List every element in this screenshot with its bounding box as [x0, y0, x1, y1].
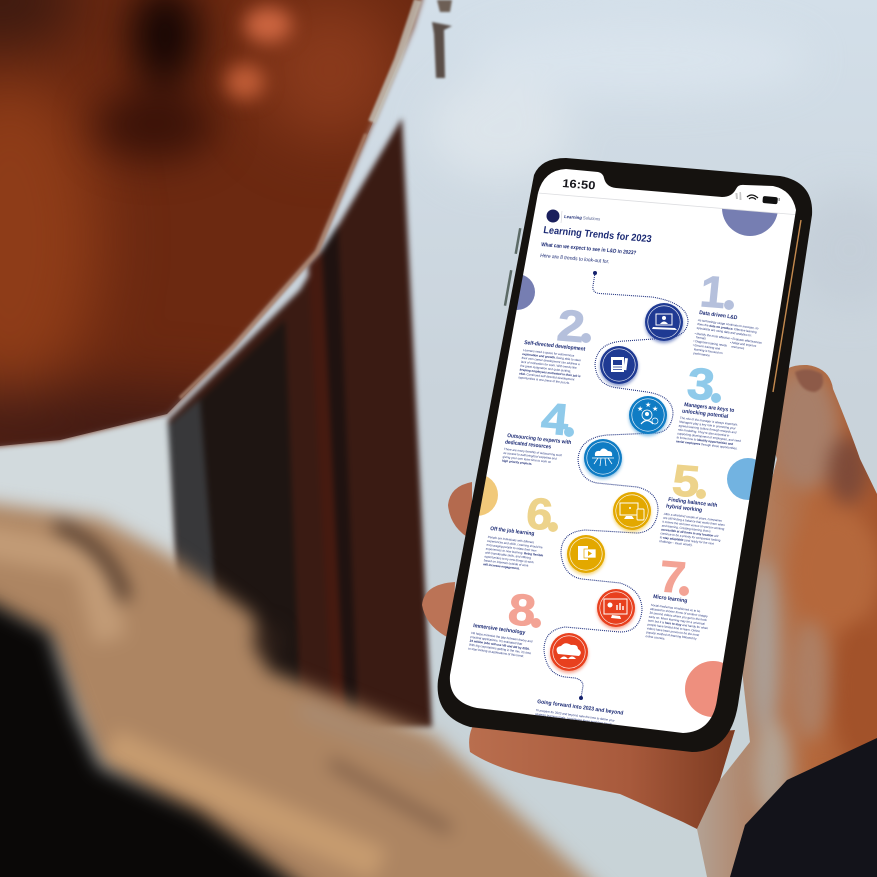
trend 5 number: 5 [670, 456, 702, 507]
trend 3 text: supporting development of employees, and need [677, 431, 742, 443]
icon: documents [600, 346, 638, 386]
trend 6 number: 6 [524, 489, 555, 540]
glasses [372, 0, 452, 122]
closing section: Going forward into 2023 and beyond [537, 699, 624, 717]
icon: monitor with charts [597, 589, 635, 629]
face [0, 0, 440, 470]
phone body [438, 158, 812, 752]
closing section [534, 699, 624, 731]
decorative circle bottom right [685, 661, 723, 717]
trend 2 number: 2 [555, 301, 587, 352]
trend 5 text: are still finding a balance that works them when [663, 516, 726, 527]
trend 5 text: and learning. Creating learning that is [661, 523, 711, 533]
trend 2 text: their own career development can address a [521, 356, 580, 366]
icon: stars and person: ★ [645, 401, 651, 409]
trend 6 text [482, 526, 547, 573]
trend 7 number: 7 [657, 552, 688, 603]
battery icon [762, 196, 780, 204]
trend 3 text: Managers are keys to [684, 402, 735, 414]
trend 4 text: as access to authoring/tool expertise and [503, 451, 557, 461]
decorative circle top right [722, 208, 778, 236]
trend 6 text: will increase engagement. [482, 562, 520, 571]
trend 5 text: hybrid working [666, 504, 703, 514]
trend 3 text: assist employees through these opportunities. [676, 439, 738, 451]
trend 7 text: attracted to shorter forms of content: snappy [650, 607, 709, 618]
status bar time: 16:50 [562, 178, 596, 192]
trend 4 number: 4 [539, 394, 571, 445]
trend 1 text: does the data we produce. Effective learning [697, 322, 757, 334]
eye socket shadow [95, 0, 215, 159]
trend 1 number [701, 276, 734, 310]
trend 3 text: Managers play a key role in promoting your [679, 420, 736, 430]
closing section: and how they support your organisation. [534, 716, 587, 727]
logo [546, 210, 601, 223]
trend 3 text: to know how to identify opportunities and [676, 435, 734, 446]
trend 7 text [645, 594, 713, 646]
logo text: Learning Solutions [564, 214, 601, 222]
closing section: strategic learning goals, considering these important trends [535, 712, 613, 726]
icon: cloud of people [550, 633, 588, 673]
trend 1 text: • Evaluate effectiveness [730, 336, 763, 345]
window frame [168, 118, 432, 730]
trend 1 text [692, 310, 762, 356]
jaw rim light [180, 134, 366, 398]
trend 8 text: Immersive technology [473, 623, 526, 636]
trend 3 number [687, 368, 721, 403]
trend 5 text: accessible at all times in any location will [661, 527, 719, 538]
trend 7 text: Micro learning [653, 594, 688, 604]
trend 3 text: unlocking potential [682, 409, 729, 420]
trend 5 text [659, 497, 729, 551]
copper edge glint [773, 220, 801, 392]
trend 2 text [518, 340, 586, 386]
trend 2 text: Learners need a space for autonomous [523, 348, 575, 358]
closing section: To prepare for 2023 and beyond, take the time to define your [535, 708, 615, 723]
trend 5 text: continue to be a priority for companies looking [660, 531, 721, 542]
left fingers [422, 482, 472, 640]
trend 7 text: early on. Micro learning may be a universal [648, 615, 705, 626]
clouds [430, 24, 877, 310]
decorative circle right blue [727, 458, 756, 500]
thumbnail [795, 369, 823, 392]
face tones [0, 0, 400, 470]
trend 1 text: Data driven L&D [699, 310, 738, 321]
icon: cloud gear [584, 439, 622, 479]
trend 1 text: • Adapt and improve [730, 340, 757, 348]
icon: video page [567, 535, 605, 575]
trend 2 text: exploration and growth. Being able to steer [522, 352, 581, 362]
trend 7 text: videos have been proven to be the most [646, 626, 700, 637]
icon: desktop and phone [613, 492, 651, 532]
dotted timeline path [544, 273, 688, 698]
trend 6 text: with transferable skills, and offering [485, 551, 532, 560]
trend 1 text: • Ensure training and [692, 343, 721, 351]
trend 1 text: formats [696, 335, 707, 341]
wifi icon [747, 195, 758, 200]
trend 1 text: learning is focused on [694, 347, 723, 355]
subtitle: What can we expect to see in L&D in 2023? [541, 242, 637, 257]
trend 1 text: resources [731, 345, 745, 350]
intro line: Here are 8 trends to look-out for. [540, 253, 610, 265]
trend 1 number: 1 [698, 267, 728, 318]
trend 4 text: Outsourcing to experts with [507, 433, 572, 446]
icon: stars and person [629, 396, 667, 436]
timeline start dot [593, 271, 597, 275]
trend 7 text: popular method of learning followed by [646, 630, 697, 641]
trend 6 text: experiences to new learning. Being flexible [485, 547, 544, 557]
trend 4 text: There are many benefits of outsourcing such [504, 447, 563, 457]
trend 7 text: online courses. [645, 634, 666, 641]
scarf [0, 500, 610, 877]
trend 7 text: 30 second videos where you get to the hook [649, 611, 708, 622]
bottom fingers [469, 716, 735, 829]
trend 8 text: VR helps minimise the gap between theory and [471, 631, 533, 644]
trend 1 text: • Identify the most effective [694, 331, 730, 340]
side buttons [504, 228, 521, 306]
decorative circle left yellow [479, 476, 498, 516]
status bar divider [538, 193, 800, 215]
trend 2 text: opportunities is one piece of the puzzle. [518, 375, 570, 385]
trend 8 text: 23 million jobs will use VR and AR by 2030. [469, 639, 530, 651]
trend 5 text: to stay adaptable (and ready for the next [659, 535, 714, 546]
trend 5 text: it comes the at-home versus on-person working [662, 520, 725, 531]
trend 2 text: lack of motivation for work. With trends like [521, 360, 577, 370]
trend 8 text [468, 623, 535, 659]
left window gap [0, 420, 185, 580]
trend 8 text: practical applications. It's estimated that [470, 635, 523, 646]
trend 5 text: challenge – touch wood!). [659, 539, 693, 547]
phone [430, 150, 820, 752]
trend 2 text: keeping employees motivated in their job is [519, 368, 581, 378]
skin tones [750, 369, 877, 820]
timeline end dot [579, 696, 583, 700]
trend 3 text: The role of the manager is always important. [680, 416, 738, 427]
status icons [735, 192, 780, 204]
trend 6 text: encouraging people to relate their own [486, 543, 537, 553]
screen background [450, 193, 796, 733]
trend 4 text: giving your own team time to work on [502, 455, 552, 464]
trend 8 text: to start looking at applications of this trend. [468, 646, 524, 658]
trend 2 text: vital. Continued self-directed development [519, 371, 575, 382]
nose highlight [225, 7, 292, 100]
trend 2 number [557, 310, 591, 343]
status bar background [722, 184, 778, 213]
sleeve [730, 738, 877, 877]
screen [450, 169, 796, 733]
trend 5 text: Finding balance with [668, 497, 718, 509]
icon: laptop [645, 303, 683, 343]
trend 3 number: 3 [685, 359, 717, 410]
trend 7 text: Social media has conditioned us to be [650, 603, 701, 613]
trend 8 number: 8 [506, 585, 538, 636]
trend 1 text: • Diagnose training needs [693, 339, 728, 348]
icon: stars and person: ★ [652, 405, 658, 413]
trend 6 text: People are individuals with different [487, 535, 534, 544]
trend 4 text: high priority projects. [502, 459, 533, 466]
trend 4 text [502, 433, 572, 470]
trend 5 text: After a whirlwind couple of years, companies [663, 512, 723, 523]
trend 6 text: opportunities to try new things at work [484, 554, 535, 564]
icon: stars and person: ★ [637, 405, 643, 413]
trend 7 text: people have limited time to learn. Online [647, 622, 701, 633]
trend 6 text: experiences and skills. Learning should be [487, 539, 543, 549]
trend 2 text: Self-directed development [524, 340, 586, 353]
black jacket [0, 590, 320, 877]
back of hand and thumb [697, 365, 877, 877]
trend 1 text: specialists are using data and analytics to: [696, 326, 752, 338]
decorative circle left blue [516, 275, 535, 310]
trend 3 text [676, 402, 741, 450]
trend 2 text: the great resignation and quiet quitting, [520, 364, 572, 373]
trend 4 text: dedicated resources [505, 440, 552, 451]
trend 8 text: With big corporations getting in the mix, it's time [469, 643, 532, 655]
trend 3 text: agreed learning culture through rewards and [678, 424, 737, 435]
trend 6 text: based on interests outside of work [483, 558, 529, 568]
title: Learning Trends for 2023 [543, 225, 653, 245]
trend 6 text: Off the job learning [490, 526, 535, 537]
trend 1 text: As technology usage continues to increase, so [698, 318, 759, 331]
trend 1 text: performance [693, 351, 711, 357]
trend 7 text: term but it is here to stay and handy for when [648, 619, 709, 630]
trend 3 text: role modelling. They're also essential in [678, 427, 730, 438]
